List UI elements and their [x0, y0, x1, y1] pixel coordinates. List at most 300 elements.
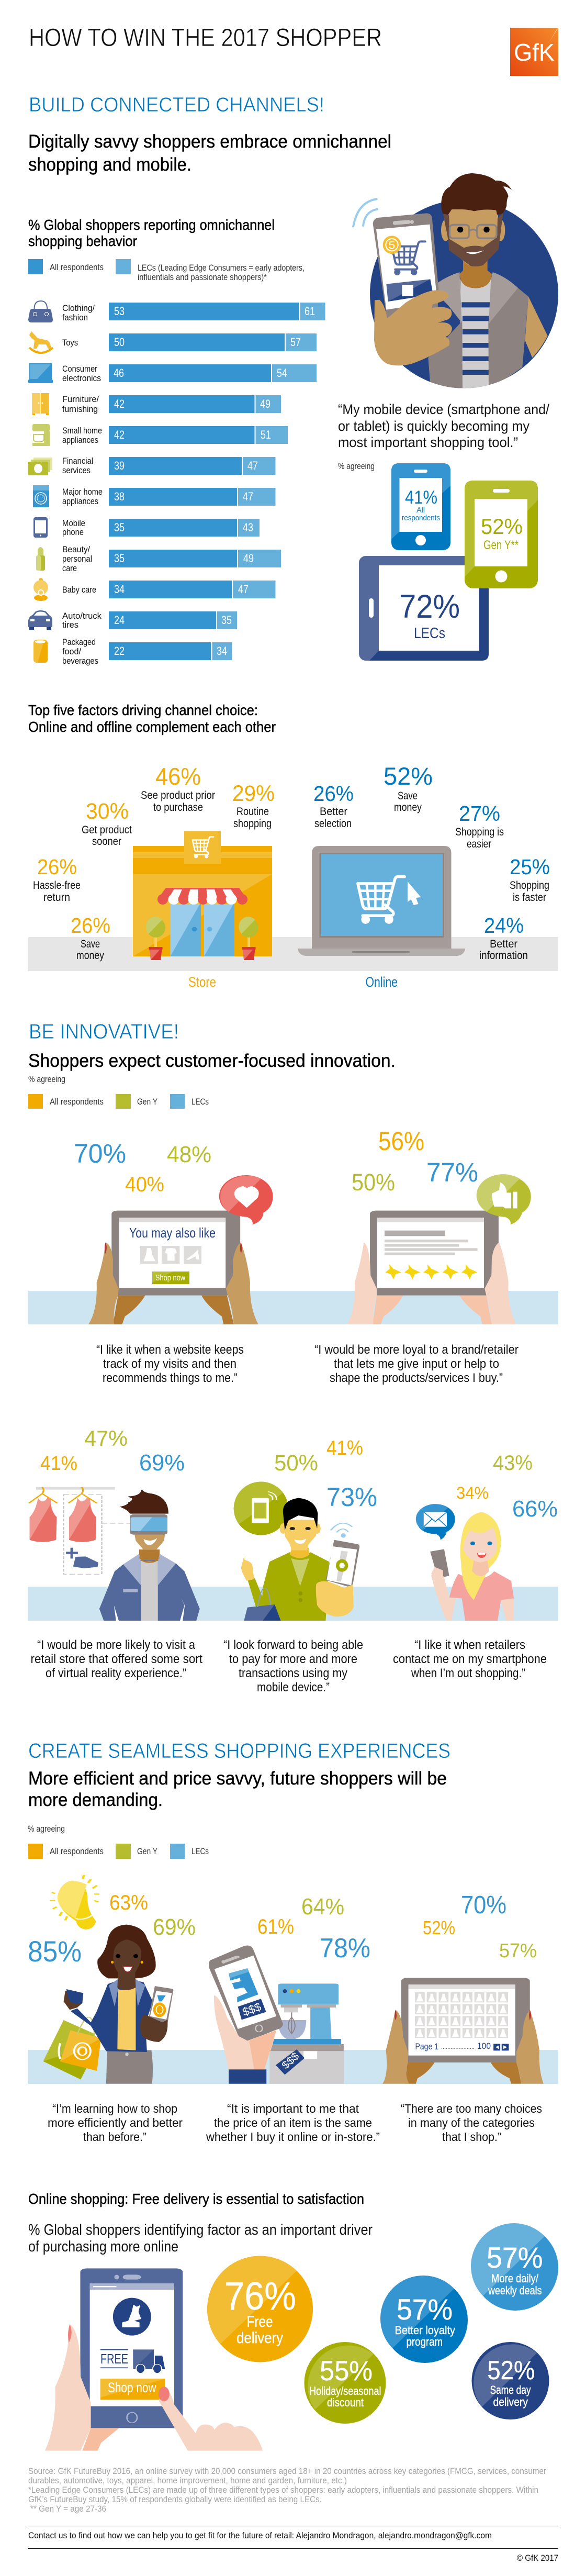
stat: 26% save money [71, 913, 110, 962]
illustration: store [133, 831, 272, 960]
quote: mobile device: or tablet) is quickly becoming my [338, 418, 529, 434]
store sign with cart [184, 831, 221, 864]
icon: handbag [28, 301, 53, 322]
bubble: 52% same day: Same day [490, 2383, 531, 2396]
stat: 24% better information: information [479, 950, 528, 962]
bar row: toys: 57 [290, 336, 301, 349]
shirt and body [261, 1552, 329, 1621]
stat: 26% better selection [313, 782, 354, 830]
stat: 27% shopping is easier [455, 801, 504, 850]
bubble: 57% deals: 57% [487, 2241, 543, 2274]
bar row: packaged food: 22 [114, 644, 125, 657]
icon: car [28, 610, 52, 630]
stats: too many choices: 70% [461, 1891, 506, 1919]
quote: choices: that I shop.” [442, 2130, 501, 2144]
icon: can [33, 640, 48, 663]
stats: virtual reality [40, 1426, 185, 1476]
bar row: packaged food: food/ [62, 646, 81, 656]
text: important driver: % Global shoppers identifying factor as an important driver [28, 2222, 373, 2238]
bar row: packaged food [33, 637, 232, 666]
icon: pacifier [33, 578, 48, 601]
label: % agreeing: % agreeing [338, 461, 375, 471]
heading: top five factors: Top five factors driving channel choice: [28, 702, 258, 718]
stat: 46%: to purchase [153, 801, 203, 813]
icon: rocking horse [29, 331, 53, 353]
stats: learning to shop: 63% [109, 1891, 148, 1914]
quote: mobile device: most important shopping tool.” [338, 434, 518, 450]
legend: seamless: LECs [191, 1846, 209, 1856]
legend: All respondents [50, 262, 104, 272]
quote: loyalty [314, 1343, 519, 1385]
illustration: smartphone woman [416, 1504, 514, 1621]
hair [460, 1512, 501, 1600]
subheading [28, 131, 391, 175]
bar row: financial services: 39 [114, 459, 125, 472]
device: blue phone 41%: respondents [402, 514, 440, 522]
pagination text: ..................... [441, 2043, 475, 2050]
payment bubble [234, 1482, 288, 1535]
stat: 26% save money: Save [81, 938, 100, 950]
illustration: phone and mixer [209, 1946, 344, 2084]
subheading: shopping and mobile. [28, 154, 191, 175]
device: tablet 72% LECs: 72% [399, 588, 460, 625]
stat: 26% save money: 26% [71, 913, 110, 938]
bubble: 57% loyalty: program [407, 2335, 443, 2348]
quote: choices: in many of the categories [408, 2116, 535, 2129]
source notes: ** Gen Y = age 27-36 [30, 2504, 106, 2514]
quote: loyalty: that lets me give input or help to [334, 1357, 499, 1371]
bar row: auto: tires [62, 620, 78, 630]
price on phone: $$$ [241, 2000, 263, 2019]
stats: mobile payment: 73% [326, 1482, 377, 1512]
cursor [408, 882, 421, 905]
stat: 52% save money: Save [398, 790, 418, 802]
bubble: 52% same day: delivery [493, 2395, 528, 2408]
title: HOW TO WIN THE 2017 SHOPPER [29, 24, 382, 52]
arm and raised hand [247, 1578, 264, 1621]
bar row: mobile phone: 35 [114, 521, 125, 534]
icon: dress and shoe [113, 2298, 151, 2336]
bubble: 52% same day [472, 2342, 549, 2419]
bar row: beauty: personal [62, 554, 92, 564]
bar row: small home appliances: 51 [261, 428, 271, 441]
stats: website recommendations [74, 1139, 211, 1196]
stat: 52% save money: 52% [384, 762, 433, 790]
bar row: financial services [28, 456, 275, 475]
rating stars [385, 1264, 478, 1279]
dashed selection [64, 1495, 130, 1574]
clothes rail [36, 1487, 115, 1490]
phone with product [209, 1946, 283, 2042]
section heading: be innovative [28, 1020, 396, 1084]
arms [431, 1570, 514, 1621]
illustration: laptop [298, 846, 465, 956]
stats: website recommendations: 70% [74, 1139, 126, 1168]
bar row: beauty: care [62, 563, 77, 573]
quote: pay: “I look forward to being able [223, 1638, 363, 1652]
stat: 26% hassle-free: return [43, 891, 70, 904]
chart heading: shopping behavior [28, 233, 137, 249]
bar row: small home appliances: Small home [62, 426, 102, 436]
bar row: furniture: furnishing [62, 404, 98, 414]
stat: 27% shopping is easier: Shopping is [455, 826, 504, 838]
stats: learning to shop: 69% [153, 1914, 196, 1940]
stat: 29%: 29% [232, 781, 275, 806]
stat: 46% [141, 763, 215, 813]
stats: brand loyalty: 77% [426, 1157, 478, 1187]
device: tablet 72% LECs: LECs [414, 625, 445, 642]
FREE label: FREE [100, 2351, 128, 2367]
bar row: baby care: 47 [238, 583, 249, 596]
label: online: Online [365, 974, 398, 990]
stats: brand loyalty: 56% [378, 1127, 424, 1156]
bubble: 57% deals [471, 2223, 558, 2311]
bar row: clothing: 53 [114, 305, 125, 318]
icon: washing machine [33, 485, 49, 507]
bubble: 55% holiday: discount [327, 2396, 364, 2409]
stats: learning to shop [28, 1891, 196, 1968]
bar row: toys [29, 331, 317, 353]
bubble: 76% free delivery: 76% [224, 2274, 296, 2318]
sleeve [229, 2069, 266, 2084]
section heading: be innovative: % agreeing [28, 1074, 65, 1084]
stats: website recommendations: 48% [167, 1142, 211, 1167]
illustration: phone free delivery [45, 2268, 263, 2451]
text lines [385, 1231, 478, 1255]
bubble: 57% loyalty [380, 2276, 468, 2363]
button [100, 2379, 165, 2400]
bar row: mobile phone: Mobile [62, 518, 85, 528]
neck and face [117, 1972, 136, 1990]
section heading: seamless shopping [28, 1739, 450, 1834]
stats: mobile payment: 50% [274, 1451, 318, 1476]
bar row: beauty: 35 [114, 552, 125, 565]
quote: pay: transactions using my [239, 1666, 347, 1680]
shop now button [152, 1272, 189, 1284]
plant left [146, 917, 165, 960]
quote: price: the price of an item is the same [214, 2116, 372, 2129]
icon: wardrobe [32, 393, 49, 415]
source notes: GfK’s FutureBuy study, 15% of respondents globally were identified as being LECs. [28, 2494, 322, 2504]
label: store: Store [188, 974, 216, 990]
left hand [88, 1242, 119, 1324]
quote: efficient: “I’m learning how to shop [52, 2102, 177, 2115]
stat: 30%: 30% [86, 799, 129, 824]
bar row: furniture: 42 [114, 397, 125, 410]
phone [430, 1549, 449, 1577]
illustration: man with smartphone [353, 173, 558, 391]
bar row: auto: 35 [221, 614, 232, 627]
stats: price: 64% [301, 1894, 344, 1920]
panel: omnichannel bar chart [28, 217, 325, 666]
bubble: 55% holiday: 55% [320, 2356, 373, 2387]
product grid [415, 1992, 510, 2038]
shop now button: Shop now [155, 1274, 185, 1283]
awning [157, 888, 247, 905]
bubble: 57% deals: More daily/ [491, 2272, 539, 2285]
email bubble [416, 1504, 455, 1540]
quote: VR: retail store that offered some sort [30, 1652, 202, 1666]
quote: efficient: than before.” [83, 2130, 146, 2144]
left arm and purse [71, 1991, 108, 2026]
stats: website recommendations: 40% [125, 1173, 164, 1196]
bar row: furniture [32, 393, 281, 415]
logo: GfK: GfK [514, 39, 555, 66]
bar row: consumer electronics: Consumer [62, 364, 97, 374]
illustration: tablet with rating [347, 1174, 531, 1324]
illustration: woman shopper with lightbulb [43, 1875, 173, 2084]
quote: choices [401, 2102, 542, 2144]
quote: VR: “I would be more likely to visit a [37, 1638, 196, 1652]
stats: brand loyalty: 50% [352, 1169, 395, 1196]
cart icon [358, 877, 404, 924]
illustration: VR shopper [29, 1487, 200, 1621]
bar row: clothing: 61 [305, 305, 315, 318]
hands [347, 1242, 516, 1324]
hair [97, 1925, 156, 1978]
text: important driver [28, 2222, 373, 2255]
logo: GfK [510, 28, 558, 76]
stats: retailer contact [456, 1452, 558, 1522]
pagination text: 100 [477, 2041, 491, 2051]
stat: 29%: shopping [233, 818, 272, 830]
lightbulb [50, 1875, 99, 1930]
quote: mobile device [338, 402, 549, 450]
plus and shoe [66, 1548, 98, 1568]
quote: pay: mobile device.” [257, 1680, 330, 1694]
heart bubble [219, 1175, 273, 1224]
source notes: durables, automotive, toys, apparel, home improvement, home and garden, furniture, etc.) [28, 2475, 347, 2485]
icon: laptop [28, 364, 53, 383]
bar row: financial services: services [62, 465, 91, 475]
bar row: small home appliances: appliances [62, 435, 98, 445]
section heading: be innovative: BE INNOVATIVE! [29, 1020, 179, 1043]
source notes [28, 2466, 546, 2514]
bar row: major home appliances: Major home [62, 487, 103, 497]
hand [140, 2015, 167, 2042]
pagination text: Page 1 [415, 2042, 438, 2051]
man's phone [373, 213, 438, 321]
bubble: 76% free delivery [207, 2256, 313, 2362]
store factors [33, 763, 275, 990]
quote: website: track of my visits and then [103, 1357, 236, 1371]
device: blue phone 41%: 41% [405, 487, 437, 508]
bar row: financial services: Financial [62, 456, 93, 466]
bar row: furniture: 49 [260, 397, 271, 410]
stats: retailer contact: 34% [456, 1484, 489, 1502]
free delivery truck [100, 2349, 165, 2373]
section heading: seamless shopping: more demanding. [28, 1790, 163, 1810]
contact line: Contact us to find out how we can help you to get fit for the future of retail: Alejandro Mondragon, alejandro.mondragon@gfk.com [28, 2530, 492, 2540]
chart heading: % Global shoppers reporting omnichannel [28, 217, 275, 233]
stat: 25% shopping is faster: Shopping [510, 879, 549, 891]
stats: too many choices: 52% [423, 1917, 455, 1938]
bubble: 57% loyalty: 57% [397, 2293, 453, 2326]
section: build connected channels [28, 94, 391, 175]
online factors [313, 762, 550, 990]
stat: 26% better selection: Better [320, 806, 347, 818]
hands [382, 2010, 544, 2084]
floor band: store and online [28, 937, 558, 971]
device: green phone 52%: 52% [481, 514, 523, 539]
stat: 46%: See product prior [141, 789, 215, 801]
stat: 30%: Get product [82, 824, 132, 836]
stat: 25% shopping is faster: 25% [510, 855, 550, 879]
chart heading [28, 217, 275, 249]
heading: online shopping: Online shopping: Free delivery is essential to satisfaction [28, 2191, 364, 2207]
heading: top five factors [28, 702, 276, 735]
legend: innovation: Gen Y [137, 1097, 157, 1107]
bubble: 55% holiday: Holiday/seasonal [309, 2384, 381, 2397]
source notes: *Leading Edge Consumers (LECs) are made up of three different types of shoppers: early adopters, influentials and passionate shoppers. Within [28, 2485, 538, 2495]
stats: price: 78% [320, 1933, 370, 1964]
bar row: mobile phone: phone [62, 527, 84, 537]
legend: innovation [28, 1094, 209, 1109]
holding hand [82, 2428, 119, 2451]
device: green phone 52%: Gen Y** [483, 538, 519, 552]
quote: price [206, 2102, 380, 2144]
icon: money stack [28, 458, 52, 475]
VR headset [130, 1514, 167, 1535]
quote: contact: contact me on my smartphone [393, 1652, 547, 1666]
text: important driver: of purchasing more online [28, 2238, 178, 2255]
subheading: Digitally savvy shoppers embrace omnichannel [28, 131, 391, 152]
floor band: seamless [28, 2050, 558, 2084]
pagination text [415, 2041, 491, 2051]
stat: 26% save money: money [76, 950, 104, 962]
bar row: major home appliances: 38 [114, 490, 125, 503]
stat: 29%: Routine [236, 806, 269, 818]
stat: 26% hassle-free: 26% [37, 855, 77, 879]
bar row: consumer electronics [28, 364, 317, 383]
stats: price [257, 1894, 370, 1964]
stat: 52% save money: money [394, 801, 422, 813]
bar row: baby care [33, 578, 275, 601]
device: green phone 52% [465, 481, 538, 588]
quote: contact [393, 1638, 547, 1680]
stats: mobile payment: 41% [326, 1437, 363, 1459]
stats: retailer contact: 43% [493, 1452, 533, 1475]
screen heading: You may also like [129, 1225, 216, 1241]
stat: 25% shopping is faster: is faster [513, 891, 546, 904]
stat: 27% shopping is easier: easier [467, 838, 491, 850]
bar row: major home appliances: 47 [243, 490, 253, 503]
quote: efficient: more efficiently and better [48, 2116, 183, 2129]
quote: pay [223, 1638, 363, 1694]
quote: mobile device: “My mobile device (smartphone and/ [338, 402, 549, 417]
product thumbnails [140, 1246, 201, 1264]
jacket [91, 1980, 153, 2052]
heading: top five factors: Online and offline complement each other [28, 719, 276, 735]
bubble: 57% loyalty: Better loyalty [395, 2324, 455, 2337]
stats: price: 61% [257, 1915, 294, 1938]
illustration: mobile-pay shopper [234, 1482, 359, 1621]
device: blue phone 41%: All [416, 506, 425, 515]
stats: virtual reality: 41% [40, 1453, 77, 1475]
man's phone: 5 [389, 239, 395, 251]
bubble: 76% free delivery: delivery [236, 2329, 283, 2347]
stat: 46%: 46% [155, 763, 201, 790]
bar row: clothing: Clothing/ [62, 303, 95, 313]
bar row: auto: 24 [114, 614, 125, 627]
stats: retailer contact: 66% [512, 1496, 558, 1522]
hangers and tops [29, 1487, 97, 1542]
illustration: tablet with too many choices [382, 1978, 544, 2084]
shirt [449, 1571, 514, 1621]
stats: too many choices [423, 1891, 537, 1962]
copyright: © GfK 2017 [517, 2553, 558, 2563]
bar row: packaged food: 34 [217, 644, 227, 657]
bar row: toys: 50 [114, 336, 125, 349]
legend: influentials and passionate shoppers)* [138, 272, 267, 282]
stat: 24% better information [479, 913, 528, 962]
stat: 29% [232, 781, 275, 830]
quote: website: “I like it when a website keeps [96, 1343, 244, 1357]
bar row: consumer electronics: 46 [114, 366, 124, 380]
stats: too many choices: 57% [499, 1940, 537, 1962]
bubble: 52% same day: 52% [487, 2356, 535, 2385]
stat: 30% [82, 799, 132, 847]
bar row: major home appliances: appliances [62, 496, 98, 506]
phone [325, 1540, 359, 1588]
section heading: seamless shopping: CREATE SEAMLESS SHOPPING EXPERIENCES [28, 1739, 450, 1763]
man's body [428, 272, 548, 391]
legend: seamless: Gen Y [137, 1846, 157, 1856]
stand mixer [269, 1983, 344, 2084]
icon: lipstick [36, 547, 45, 571]
plant right [239, 917, 258, 960]
wifi [331, 1523, 352, 1538]
bar row: consumer electronics: electronics [62, 373, 101, 383]
stat: 26% better selection: selection [314, 818, 352, 830]
bar row: beauty [36, 544, 281, 573]
quote: loyalty: shape the products/services I buy.” [330, 1371, 503, 1385]
stat: 26% hassle-free: Hassle-free [33, 879, 81, 891]
bubble: 76% free delivery: Free [247, 2313, 273, 2330]
skirt [106, 2050, 153, 2084]
bar row: financial services: 47 [247, 459, 258, 472]
stat: 30%: sooner [92, 835, 121, 847]
quote: website [96, 1343, 244, 1385]
wifi arcs [353, 199, 378, 227]
legend: innovation: All respondents [50, 1097, 104, 1107]
section heading: seamless shopping: % agreeing [28, 1824, 65, 1834]
floor band: tablets [28, 1291, 558, 1324]
quote: pay: to pay for more and more [229, 1652, 357, 1666]
bar row: auto: Auto/truck [62, 611, 102, 621]
face [464, 1527, 497, 1563]
pointing hand [159, 2387, 263, 2451]
door [171, 904, 234, 956]
bar row: mobile phone [33, 517, 260, 538]
stat: 27% shopping is easier: 27% [459, 801, 500, 826]
stat: 26% better selection: 26% [313, 782, 354, 806]
right hand [226, 1242, 258, 1324]
quote: website: recommends things to me.” [103, 1371, 238, 1385]
stat: 26% hassle-free [33, 855, 81, 904]
bar row: small home appliances: 42 [114, 428, 125, 441]
stats: virtual reality: 69% [139, 1450, 185, 1476]
icon: coffee machine [32, 424, 50, 446]
stat: 24% better information: Better [490, 938, 517, 950]
phone [149, 1986, 173, 2024]
legend: seamless [28, 1844, 209, 1859]
quote: VR: of virtual reality experience.” [46, 1666, 186, 1680]
stats: virtual reality: 47% [84, 1426, 128, 1451]
bar row: small home appliances [32, 424, 288, 446]
bags [43, 2017, 101, 2079]
bar row: toys: Toys [62, 338, 78, 348]
